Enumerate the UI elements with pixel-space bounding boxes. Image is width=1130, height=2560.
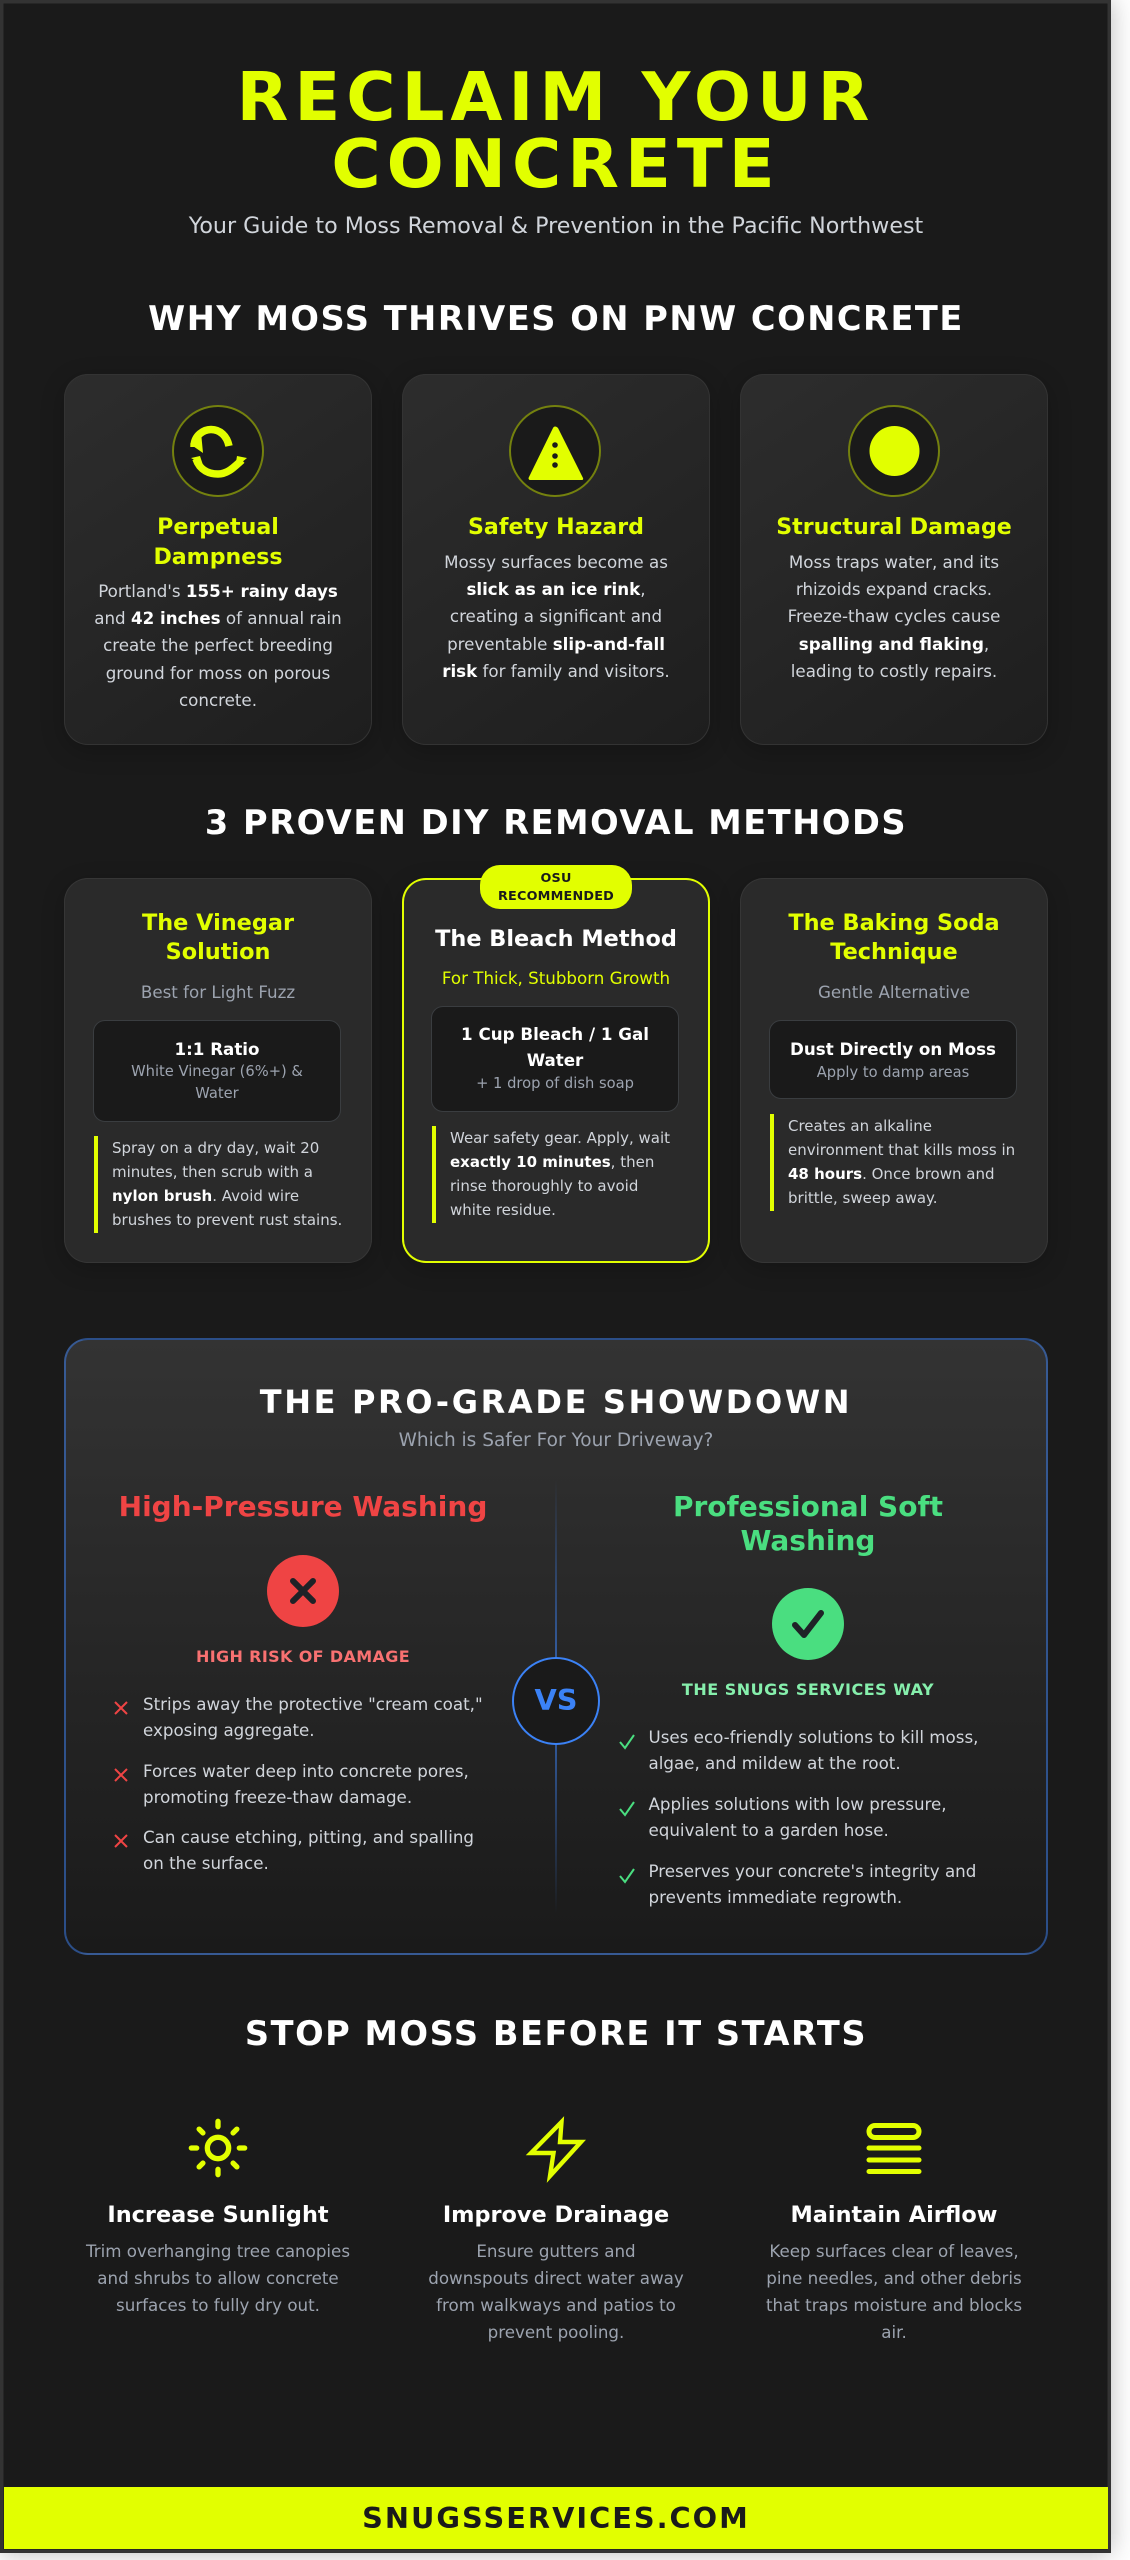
- card text: spalling and flaking,: [799, 634, 989, 654]
- recipe box: [93, 1020, 341, 1122]
- card title: Dampness: [153, 544, 283, 570]
- icon: warning triangle: [509, 405, 601, 497]
- card text: preventable slip-and-fall: [447, 634, 665, 654]
- item text: that traps moisture and blocks: [766, 2295, 1022, 2315]
- item 2: [114, 1761, 469, 1807]
- method title: [788, 910, 1000, 965]
- benefit label: THE SNUGS SERVICES WAY: [682, 1680, 934, 1699]
- accent bar: [770, 1114, 774, 1211]
- recipe box: [769, 1020, 1017, 1099]
- badge: osu recommended: [480, 865, 632, 909]
- instructions: minutes, then scrub with a: [112, 1163, 313, 1181]
- item text: [648, 1794, 947, 1840]
- panel: maintain airflow: [740, 2110, 1048, 2350]
- card title: Safety Hazard: [468, 514, 644, 540]
- title: [237, 58, 875, 202]
- panel: perpetual dampness: [64, 374, 372, 745]
- method title: The Bleach Method: [435, 926, 677, 952]
- column: soft washing: [619, 1490, 978, 1907]
- recipe detail: Water: [195, 1085, 239, 1102]
- instructions: [112, 1139, 342, 1229]
- icon: x mark: [114, 1834, 128, 1848]
- instructions: brushes to prevent rust stains.: [112, 1211, 342, 1229]
- title: RECLAIM YOUR: [237, 58, 875, 136]
- panel: vinegar method: [64, 878, 372, 1263]
- card text: Freeze-thaw cycles cause: [788, 606, 1000, 626]
- recipe detail: [131, 1063, 303, 1102]
- panel: pro-grade showdown: [64, 1338, 1048, 1955]
- recipe box: [431, 1006, 679, 1112]
- card text: [788, 552, 1000, 681]
- instructions: 48 hours. Once brown and: [788, 1165, 994, 1183]
- item title: Improve Drainage: [443, 2202, 669, 2228]
- accent bar: [94, 1136, 98, 1233]
- icon: x mark: [114, 1768, 128, 1782]
- column: high-pressure washing: [114, 1490, 487, 1873]
- item text: [740, 2238, 1048, 2346]
- item text: exposing aggregate.: [143, 1720, 315, 1740]
- card text: rhizoids expand cracks.: [796, 579, 992, 599]
- item text: Can cause etching, pitting, and spalling: [143, 1827, 474, 1847]
- recipe detail: White Vinegar (6%+) &: [131, 1063, 303, 1080]
- item 1: [114, 1694, 483, 1740]
- heading: diy methods: 3 PROVEN DIY REMOVAL METHODS: [205, 803, 907, 842]
- vs badge: VS: [534, 1683, 578, 1717]
- item text: on the surface.: [143, 1853, 269, 1873]
- icon: sun: [188, 2118, 248, 2178]
- item 3: [114, 1827, 474, 1873]
- instructions: [450, 1129, 670, 1219]
- item text: Keep surfaces clear of leaves,: [769, 2241, 1019, 2261]
- method subtitle: For Thick, Stubborn Growth: [442, 968, 670, 988]
- showdown heading: THE PRO-GRADE SHOWDOWN: [260, 1383, 852, 1421]
- card text: creating a significant and: [450, 606, 662, 626]
- method subtitle: Best for Light Fuzz: [141, 982, 295, 1002]
- item text: surfaces to fully dry out.: [116, 2295, 320, 2315]
- item text: Forces water deep into concrete pores,: [143, 1761, 469, 1781]
- item text: [648, 1727, 978, 1773]
- icon: red x: [267, 1555, 339, 1627]
- card text: concrete.: [179, 690, 257, 710]
- item text: [143, 1761, 469, 1807]
- footer banner: SNUGSSERVICES.COM: [362, 2501, 750, 2535]
- recipe detail: Apply to damp areas: [817, 1064, 969, 1081]
- card text: Moss traps water, and its: [789, 552, 999, 572]
- panel: improve drainage: [428, 2116, 684, 2342]
- item text: [648, 1861, 976, 1907]
- item text: [143, 1827, 474, 1873]
- icon: x mark: [114, 1701, 128, 1715]
- item text: Trim overhanging tree canopies: [86, 2241, 350, 2261]
- subtitle: Your Guide to Moss Removal & Prevention in the Pacific Northwest: [189, 213, 923, 239]
- panel: bleach method (featured): [402, 878, 710, 1263]
- method subtitle: Gentle Alternative: [818, 982, 970, 1002]
- column title: Washing: [741, 1524, 875, 1556]
- instructions: Wear safety gear. Apply, wait: [450, 1129, 670, 1147]
- item 1: [619, 1727, 978, 1773]
- item text: and shrubs to allow concrete: [97, 2268, 339, 2288]
- item text: [143, 1694, 483, 1740]
- title: CONCRETE: [331, 124, 781, 202]
- item title: Increase Sunlight: [107, 2202, 329, 2228]
- method title: The Vinegar: [142, 910, 294, 936]
- item title: Maintain Airflow: [791, 2202, 997, 2228]
- item text: prevents immediate regrowth.: [648, 1887, 902, 1907]
- instructions: white residue.: [450, 1201, 556, 1219]
- icon: stacked bars: [862, 2116, 926, 2180]
- icon: recycling arrows: [172, 405, 264, 497]
- panel: baking soda method: [740, 878, 1048, 1263]
- recipe title: Dust Directly on Moss: [790, 1039, 996, 1059]
- item text: Applies solutions with low pressure,: [648, 1794, 947, 1814]
- card text: leading to costly repairs.: [791, 661, 997, 681]
- instructions: Creates an alkaline: [788, 1117, 932, 1135]
- badge: osu recommended: RECOMMENDED: [498, 889, 614, 904]
- card title: [153, 514, 283, 570]
- accent bar: [432, 1126, 436, 1223]
- method title: Solution: [166, 939, 270, 965]
- item 2: [619, 1794, 947, 1840]
- item text: Uses eco-friendly solutions to kill moss,: [648, 1727, 978, 1747]
- instructions: exactly 10 minutes, then: [450, 1153, 654, 1171]
- instructions: nylon brush. Avoid wire: [112, 1187, 299, 1205]
- recipe title: 1:1 Ratio: [174, 1039, 259, 1059]
- card text: Mossy surfaces become as: [444, 552, 668, 572]
- column title: [673, 1490, 943, 1556]
- card text: slick as an ice rink,: [466, 579, 646, 599]
- showdown subheading: Which is Safer For Your Driveway?: [399, 1430, 713, 1451]
- panel: increase sunlight: [86, 2118, 350, 2315]
- column title: Professional Soft: [673, 1490, 943, 1523]
- recipe detail: + 1 drop of dish soap: [476, 1075, 634, 1092]
- icon: solid circle: [848, 405, 940, 497]
- card text: risk for family and visitors.: [442, 661, 670, 681]
- divider line: [555, 1480, 557, 1914]
- instructions: rinse thoroughly to avoid: [450, 1177, 638, 1195]
- card title: Perpetual: [157, 514, 279, 540]
- footer banner: [4, 2487, 1108, 2549]
- risk label: HIGH RISK OF DAMAGE: [196, 1647, 410, 1666]
- item text: algae, and mildew at the root.: [648, 1753, 901, 1773]
- heading: why moss thrives: WHY MOSS THRIVES ON PNW CONCRETE: [148, 299, 964, 338]
- item 3: [619, 1861, 976, 1907]
- recipe title: Water: [527, 1050, 583, 1070]
- icon: check mark: [619, 1801, 635, 1817]
- item text: [402, 2238, 710, 2346]
- instructions: [788, 1117, 1015, 1207]
- card text: [442, 552, 670, 681]
- item text: from walkways and patios to: [436, 2295, 676, 2315]
- item text: downspouts direct water away: [428, 2268, 684, 2288]
- vs badge: [512, 1657, 600, 1745]
- icon: check mark: [619, 1734, 635, 1750]
- method title: The Baking Soda: [788, 910, 1000, 936]
- item text: Strips away the protective "cream coat,": [143, 1694, 483, 1714]
- item text: Preserves your concrete's integrity and: [648, 1861, 976, 1881]
- card text: ground for moss on porous: [106, 663, 330, 683]
- icon: check mark: [619, 1868, 635, 1884]
- heading: prevention: STOP MOSS BEFORE IT STARTS: [245, 2014, 867, 2053]
- card text: create the perfect breeding: [103, 635, 333, 655]
- instructions: brittle, sweep away.: [788, 1189, 938, 1207]
- item text: air.: [881, 2322, 907, 2342]
- card text: [94, 581, 342, 710]
- item text: pine needles, and other debris: [766, 2268, 1022, 2288]
- recipe title: [461, 1024, 649, 1070]
- item text: promoting freeze-thaw damage.: [143, 1787, 412, 1807]
- method title: [142, 910, 294, 965]
- instructions: environment that kills moss in: [788, 1141, 1015, 1159]
- panel: safety hazard: [402, 374, 710, 745]
- icon: green check: [772, 1588, 844, 1660]
- method title: Technique: [830, 939, 958, 965]
- item text: prevent pooling.: [488, 2322, 624, 2342]
- panel: structural damage: [740, 374, 1048, 745]
- card text: Portland's 155+ rainy days: [98, 581, 338, 601]
- item text: Ensure gutters and: [476, 2241, 636, 2261]
- icon: lightning bolt: [526, 2116, 586, 2183]
- item text: [86, 2241, 350, 2315]
- recipe title: 1 Cup Bleach / 1 Gal: [461, 1024, 649, 1044]
- card title: Structural Damage: [776, 514, 1012, 540]
- badge: osu recommended: OSU: [540, 870, 572, 886]
- instructions: Spray on a dry day, wait 20: [112, 1139, 319, 1157]
- column title: High-Pressure Washing: [119, 1490, 487, 1523]
- item text: equivalent to a garden hose.: [648, 1820, 889, 1840]
- card text: and 42 inches of annual rain: [94, 608, 342, 628]
